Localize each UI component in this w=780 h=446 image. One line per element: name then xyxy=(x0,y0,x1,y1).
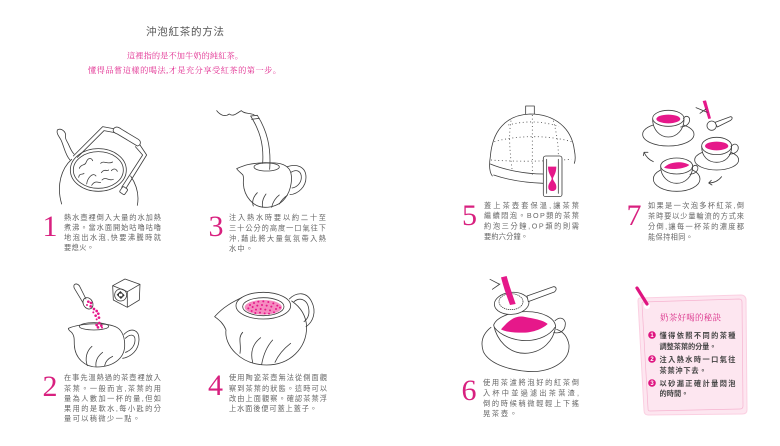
icon: teapot with tea leaves xyxy=(68,279,140,367)
step 1 text: 熱水壺裡倒入大量的水加熱 xyxy=(64,213,161,222)
step 4 text: 改由上面觀察。確認茶葉浮 xyxy=(229,394,327,403)
step 5 text xyxy=(484,201,579,241)
step 2 text xyxy=(64,373,161,423)
step 4 text: 上水面後便可蓋上蓋子。 xyxy=(229,404,317,413)
tip 1: 懂得依照不同的茶種 xyxy=(660,331,736,340)
step 3 text: 三十公分的高度一口氣往下 xyxy=(229,224,326,232)
icon: straining tea into cup xyxy=(482,276,569,372)
icon: tea cozy and hourglass xyxy=(489,106,575,197)
step 3 text: 沖,藉此將大量氣氛帶入熱 xyxy=(229,234,326,243)
card title: 奶茶好喝的秘訣 xyxy=(660,312,721,322)
step 6 text: 倒的時候稍微輕輕上下搖 xyxy=(483,399,579,408)
step 7 text: 能保持相同。 xyxy=(648,232,693,242)
step 2 text: 在事先溫熱過的茶壺裡放入 xyxy=(64,373,161,382)
step 2 text: 量可以稍微少一點。 xyxy=(64,414,140,423)
step 4 text: 使用陶瓷茶壺無法從側面觀 xyxy=(229,373,327,382)
subtitle: 這裡指的是不加牛奶的純紅茶。 xyxy=(127,50,243,60)
icon: three cups and strainer xyxy=(643,100,739,191)
step number 7: 7 xyxy=(626,199,642,232)
step 5 text: 約泡三分鐘,OP類的則需 xyxy=(484,222,579,230)
tip 2 xyxy=(648,355,736,375)
panel: step 7 xyxy=(626,100,744,242)
tip 1: 1 xyxy=(650,333,654,339)
tip 1 xyxy=(648,331,736,351)
step 3 text: 水中。 xyxy=(229,244,253,253)
tip 2: 2 xyxy=(650,357,654,363)
step number 6: 6 xyxy=(462,374,476,407)
pin xyxy=(637,288,650,309)
step 4 text: 察到茶葉的狀態。這時可以 xyxy=(229,384,327,393)
step 7 text: 茶時要以少量輪流的方式來 xyxy=(648,212,744,220)
step 6 text: 晃茶壺。 xyxy=(483,409,517,418)
step 3 text: 注入熱水時要以約二十至 xyxy=(229,213,326,222)
step 4 text xyxy=(229,373,327,413)
tip 3: 的時間。 xyxy=(660,389,688,398)
title: 沖泡紅茶的方法 xyxy=(146,25,224,38)
panel: step 5 xyxy=(462,106,579,241)
step 2 text: 茶葉。一般而言,茶葉的用 xyxy=(64,384,161,393)
icon: pouring water into teapot xyxy=(217,111,306,207)
panel: step 6 xyxy=(462,276,579,418)
tip 2: 注入熱水時一口氣往 xyxy=(660,355,736,364)
panel: step 4 xyxy=(208,292,327,413)
step 7 text: 如果是一次泡多杯紅茶,倒 xyxy=(648,201,744,210)
tip 3: 3 xyxy=(650,381,654,387)
step 1 text xyxy=(64,213,161,252)
step 1 text: 煮沸。當水面開始咕嚕咕嚕 xyxy=(64,223,161,232)
panel: milk tea tips card xyxy=(637,288,747,415)
step 7 text: 分倒,讓每一杯茶的濃度都 xyxy=(648,222,744,231)
tip 3 xyxy=(648,379,736,398)
subtitle xyxy=(88,50,281,75)
step 1 text: 地泡出水泡,快要沸騰時就 xyxy=(64,233,161,242)
step 6 text xyxy=(483,378,579,418)
card background xyxy=(638,295,747,415)
panel: step 3 xyxy=(208,111,326,253)
step number 4: 4 xyxy=(208,369,223,402)
step number 1: 1 xyxy=(42,210,58,243)
tip 2: 茶葉沖下去。 xyxy=(660,366,706,375)
step 5 text: 要約六分鐘。 xyxy=(484,232,528,241)
step number 5: 5 xyxy=(462,199,477,232)
icon: kettle xyxy=(57,127,147,205)
step 6 text: 入杯中並過濾出茶葉渣, xyxy=(483,388,579,398)
panel: step 1 xyxy=(42,127,161,252)
tip 1: 調整茶葉的分量。 xyxy=(660,342,716,351)
step number 3: 3 xyxy=(208,210,224,243)
step 5 text: 蓋上茶壺套保溫,讓茶葉 xyxy=(484,201,579,210)
tip 3: 以砂漏正確計量悶泡 xyxy=(660,379,736,388)
step 6 text: 使用茶濾將泡好的紅茶倒 xyxy=(483,378,579,387)
step number 2: 2 xyxy=(42,370,58,403)
step 2 text: 量為人數加一杯的量,但如 xyxy=(64,394,161,403)
step 2 text: 果用的是軟水,每小匙的分 xyxy=(64,404,161,413)
icon: teapot viewed from above xyxy=(215,292,314,365)
step 5 text: 繼續悶泡。BOP類的茶葉 xyxy=(484,211,579,220)
step 7 text xyxy=(648,201,744,242)
step 3 text xyxy=(229,213,326,253)
panel: step 2 xyxy=(42,279,161,423)
step 1 text: 要熄火。 xyxy=(64,243,94,252)
subtitle: 懂得品嘗這樣的喝法,才是充分享受紅茶的第一步。 xyxy=(88,65,281,75)
